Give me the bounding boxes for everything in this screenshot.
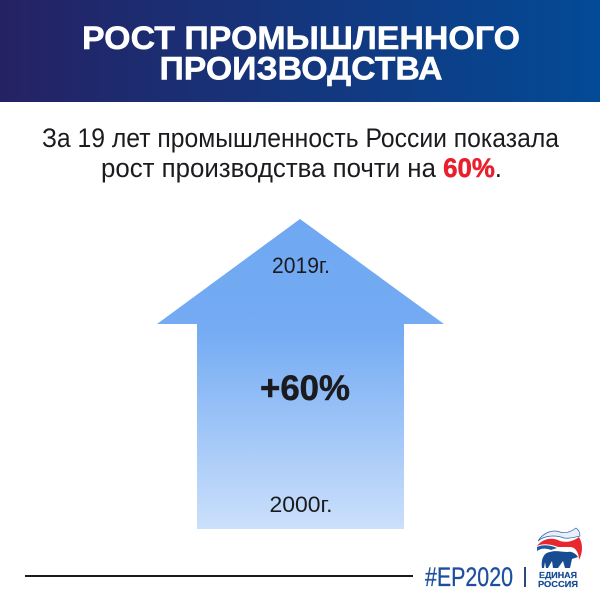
label +60%: +60% bbox=[260, 369, 350, 408]
hashtag: #ЕР2020 bbox=[425, 562, 513, 592]
subtitle text: рост производства почти на 60%. bbox=[101, 153, 502, 183]
logo wordmark bbox=[538, 570, 578, 589]
footer rule bbox=[25, 575, 413, 577]
up arrow bbox=[157, 219, 444, 529]
logo wordmark: ЕДИНАЯ bbox=[539, 570, 577, 580]
logo bbox=[537, 528, 582, 589]
title bbox=[82, 20, 520, 86]
subtitle text bbox=[42, 123, 559, 183]
label 2000: 2000г. bbox=[270, 492, 332, 517]
footer separator bbox=[524, 567, 526, 587]
subtitle text: За 19 лет промышленность России показала bbox=[42, 123, 559, 153]
label 2019: 2019г. bbox=[272, 253, 330, 278]
logo wordmark: РОССИЯ bbox=[538, 579, 578, 589]
logo flag bbox=[537, 528, 582, 560]
header banner bbox=[0, 0, 600, 102]
logo bear bbox=[542, 551, 578, 568]
title: РОСТ ПРОМЫШЛЕННОГО bbox=[82, 20, 520, 56]
title: ПРОИЗВОДСТВА bbox=[160, 50, 442, 86]
